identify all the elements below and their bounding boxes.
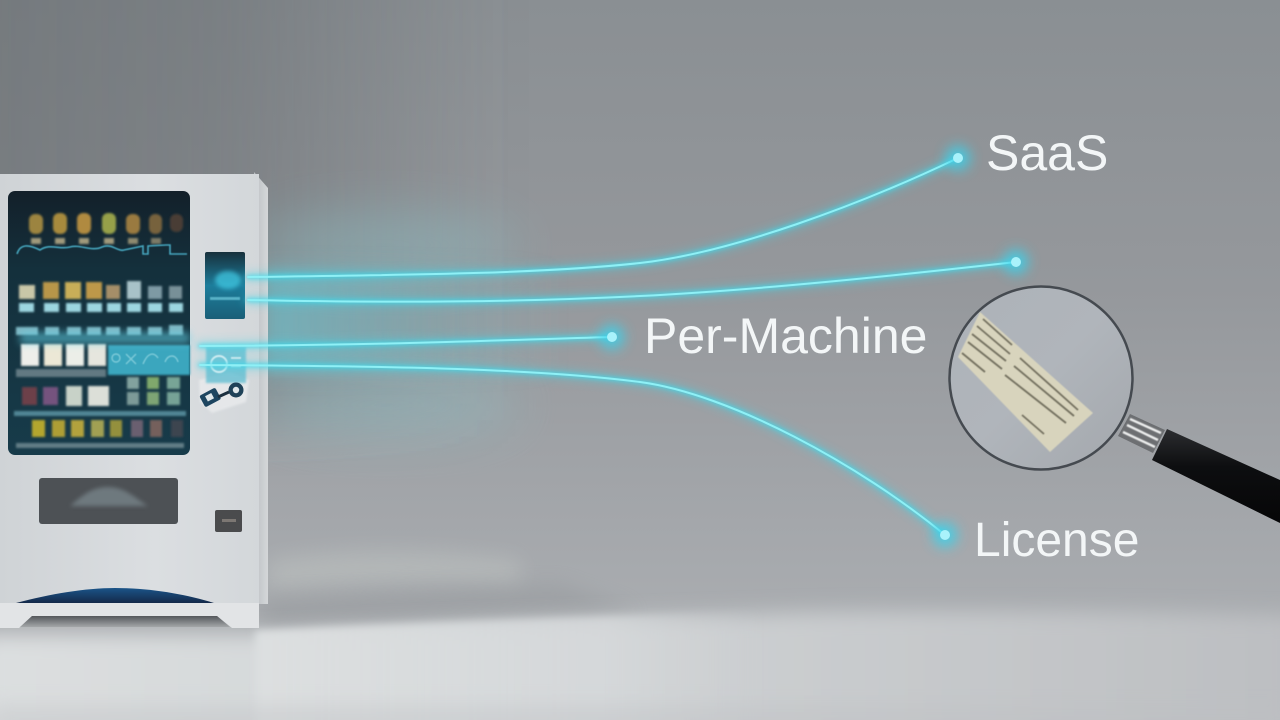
row 6 products xyxy=(32,420,183,437)
bottom retrieval slot xyxy=(39,478,178,524)
mid glow xyxy=(200,158,1016,535)
outer glow xyxy=(200,158,1016,535)
node: SaaS xyxy=(945,145,971,171)
label: SaaS: SaaS xyxy=(986,125,1108,181)
handle xyxy=(1152,429,1280,523)
row 1 products xyxy=(29,213,183,244)
teal glowing panel xyxy=(108,345,190,375)
row 5 products xyxy=(22,377,180,406)
magnifying glass over contract xyxy=(950,286,1280,523)
metal ferrule xyxy=(1118,414,1165,453)
row 6 labels xyxy=(16,443,184,448)
node: upper right xyxy=(1003,249,1029,275)
light beam haze from machine xyxy=(250,213,562,437)
machine front body xyxy=(0,174,259,605)
line: to License xyxy=(200,365,945,535)
row 2 price labels xyxy=(19,303,183,312)
payment screen xyxy=(205,252,245,319)
line: to SaaS xyxy=(248,158,958,277)
row 1 tray glow xyxy=(17,245,187,254)
machine base xyxy=(0,603,259,628)
label: License: License xyxy=(974,514,1139,567)
product window xyxy=(8,191,190,455)
glowing connection lines xyxy=(200,158,1016,535)
coin return xyxy=(215,510,242,532)
node: License xyxy=(932,522,958,548)
window glow band xyxy=(20,332,190,344)
lens xyxy=(950,286,1132,470)
machine side panel xyxy=(254,172,268,604)
label: Per-Machine: Per-Machine xyxy=(644,308,927,364)
card reader icon panel xyxy=(199,347,249,413)
row 5 labels xyxy=(14,411,186,416)
row 4 lower labels xyxy=(16,369,106,377)
line: to Per-Machine xyxy=(200,337,612,346)
vending machine xyxy=(0,172,268,628)
blue kick plate xyxy=(16,588,214,603)
node: Per-Machine xyxy=(599,324,625,350)
row 2 products xyxy=(19,281,182,299)
row 3 labels xyxy=(16,325,183,335)
contract paper xyxy=(958,312,1093,452)
row 4 white boxes xyxy=(21,344,106,366)
line: to unlabelled node xyxy=(248,262,1016,302)
